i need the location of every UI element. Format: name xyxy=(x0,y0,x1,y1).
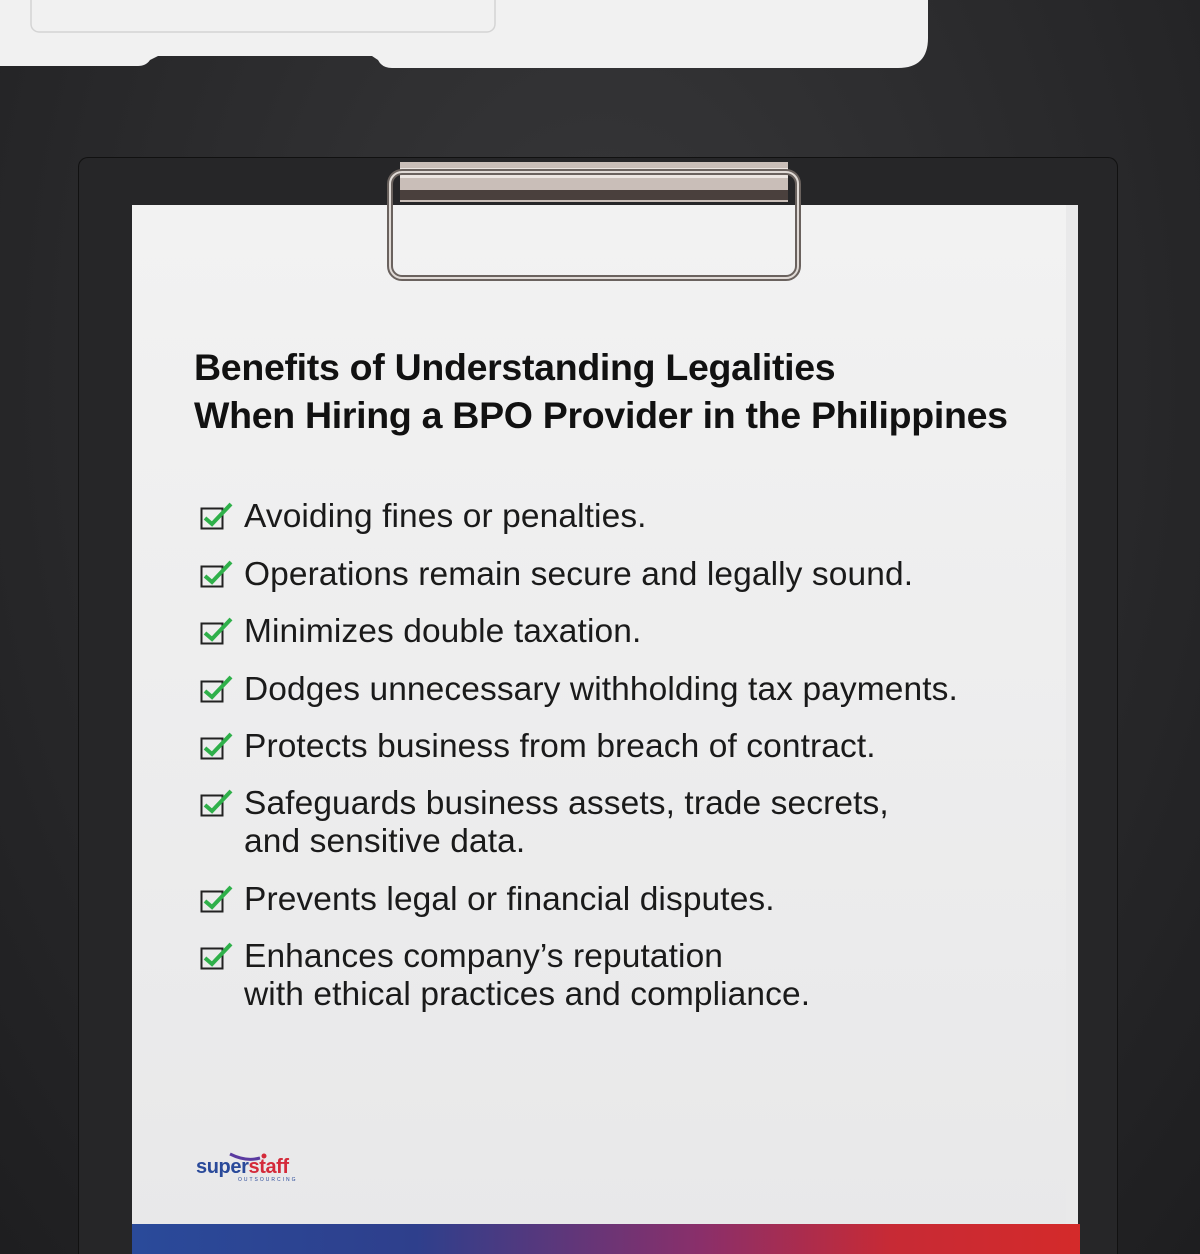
item 8 xyxy=(200,938,810,1013)
list: Operations remain secure and legally sound. xyxy=(244,556,913,593)
title: Benefits of Understanding Legalities xyxy=(194,346,835,388)
clip xyxy=(387,162,801,281)
title xyxy=(194,346,1008,436)
item 3 xyxy=(200,613,641,650)
list: Enhances company’s reputation xyxy=(244,938,723,975)
title: When Hiring a BPO Provider in the Philippines xyxy=(194,394,1008,436)
clipboard board xyxy=(78,157,1118,1254)
item 4 xyxy=(200,671,958,708)
list: Minimizes double taxation. xyxy=(244,613,641,650)
logo: OUTSOURCING xyxy=(238,1177,298,1183)
list: Prevents legal or financial disputes. xyxy=(244,881,775,918)
item 6 xyxy=(200,785,889,860)
list: and sensitive data. xyxy=(244,823,525,860)
paper xyxy=(132,205,1078,1254)
item 7 xyxy=(200,881,775,918)
list: with ethical practices and compliance. xyxy=(244,976,810,1013)
laptop xyxy=(0,0,928,68)
list: Avoiding fines or penalties. xyxy=(244,498,647,535)
item 2 xyxy=(200,556,913,593)
list: Protects business from breach of contract. xyxy=(244,728,876,765)
trackpad xyxy=(31,0,495,32)
item 5 xyxy=(200,728,876,765)
logo xyxy=(196,1152,298,1183)
list: Dodges unnecessary withholding tax payments. xyxy=(244,671,958,708)
list: Safeguards business assets, trade secrets, xyxy=(244,785,889,822)
item 1 xyxy=(200,498,647,535)
gradient bar xyxy=(132,1224,1080,1254)
logo: superstaff xyxy=(196,1156,289,1178)
